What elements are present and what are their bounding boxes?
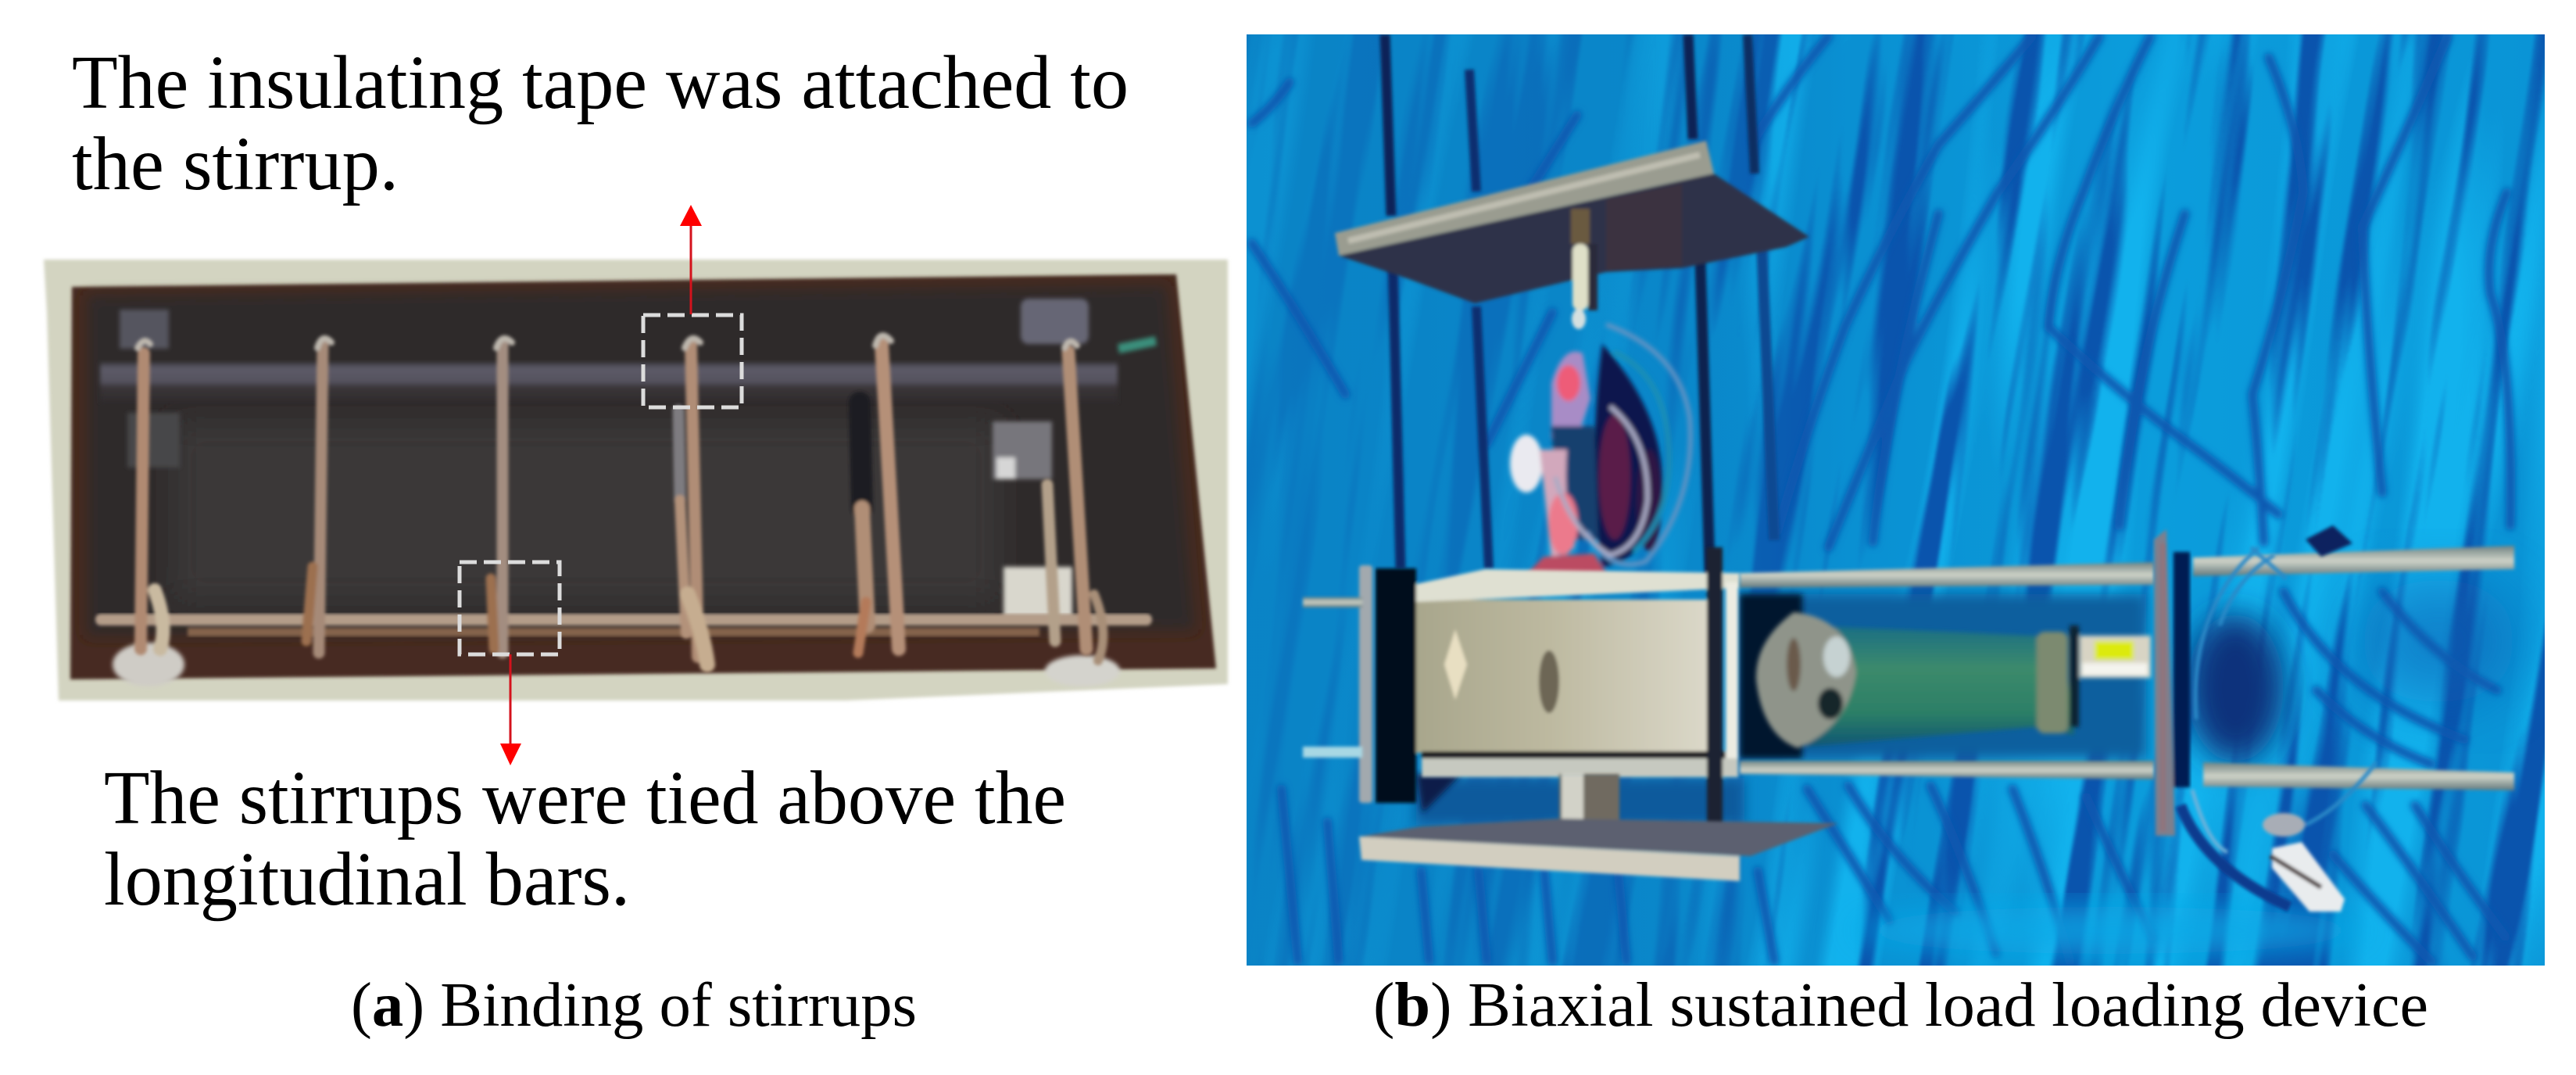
text: insulating tape note: [72, 41, 1129, 206]
tie rods: [1740, 546, 2514, 790]
vertical threaded rods: [1385, 34, 1774, 579]
bottom longitudinal bars: [95, 614, 1152, 636]
text: insulating tape note: the stirrup.: [72, 122, 399, 206]
cloth folds: noise streaks: [1247, 34, 1880, 966]
pressure gauge (red) and wires: [1510, 324, 1690, 579]
stirrups: [138, 335, 1103, 665]
text: stirrup tie note: longitudinal bars.: [104, 837, 630, 921]
spacer blocks and tape: [113, 299, 1157, 686]
white sensor and wire: [2181, 762, 2376, 912]
bottom support cylinder and plate: [1359, 774, 1838, 881]
caption (a): (a) Binding of stirrups: [351, 971, 917, 1040]
panel: photo (a) binding of stirrups: [44, 260, 1228, 701]
top longitudinal bar: [100, 362, 1118, 403]
dashed box: bottom tie point: [460, 562, 560, 654]
text: stirrup tie note: [104, 756, 1066, 921]
text: insulating tape note: The insulating tape was attached to: [72, 41, 1129, 124]
curved wires at right: [2195, 525, 2352, 719]
loaded specimen with end plates: [1303, 547, 1740, 844]
blue cloth background: [1247, 34, 2545, 966]
photo frame of the formwork: [44, 260, 1228, 701]
top loading plate: [1335, 141, 1809, 329]
caption (b): (b) Biaxial sustained load loading device: [1373, 971, 2428, 1040]
text: stirrup tie note: The stirrups were tied above the: [104, 756, 1066, 840]
arrow: up to insulating tape note: [680, 205, 702, 314]
panel: photo (b) biaxial sustained load loading device: [1247, 34, 2545, 966]
arrow: down to stirrup tie note: [500, 654, 521, 765]
dashed box: top tie point: [643, 315, 742, 407]
cloth folds: drawn creases: [1252, 36, 2510, 962]
dark formwork interior: [70, 274, 1216, 679]
hydraulic jack: [1756, 612, 2151, 748]
dark and bright shaded cloth areas: [1416, 579, 2517, 954]
reaction plate: [2154, 529, 2190, 836]
